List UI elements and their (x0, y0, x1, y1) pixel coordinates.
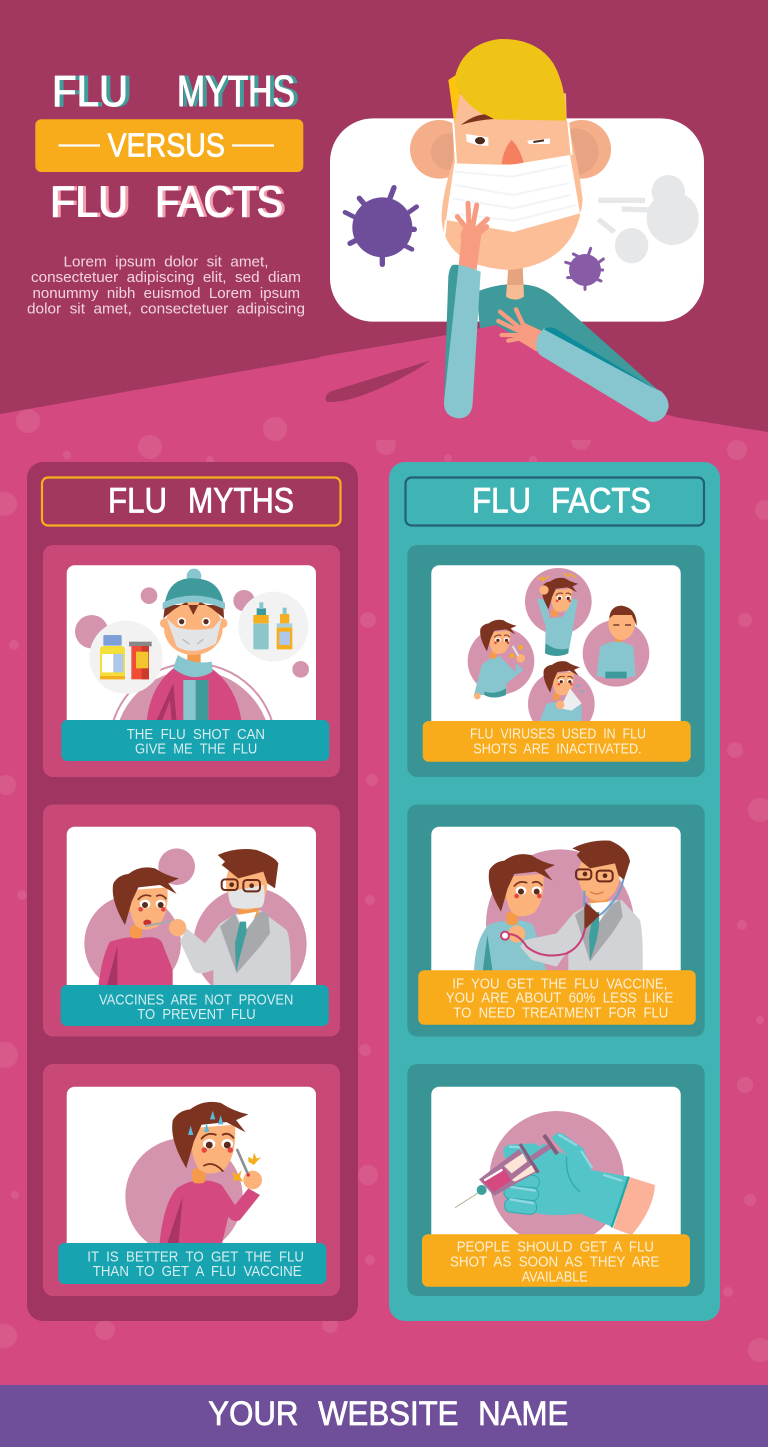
icon: large virus (345, 188, 417, 264)
caption (418, 970, 696, 1025)
right sleeve (536, 327, 669, 422)
caption (58, 1243, 326, 1284)
illustration: masked patient with medicine (75, 568, 309, 720)
caption: SHOTS ARE INACTIVATED. (473, 741, 642, 757)
caption: THAN TO GET A FLU VACCINE (93, 1264, 302, 1280)
intro text (27, 254, 305, 318)
footer (0, 1385, 768, 1447)
neck (506, 267, 524, 300)
pink blanket background (0, 325, 768, 1447)
illustration: four flu symptoms (468, 568, 649, 737)
head (442, 93, 583, 270)
hair (448, 39, 566, 124)
caption: IF YOU GET THE FLU VACCINE, (452, 976, 667, 992)
caption: PEOPLE SHOULD GET A FLU (457, 1240, 654, 1256)
caption: VACCINES ARE NOT PROVEN (99, 992, 293, 1008)
caption: SHOT AS SOON AS THEY ARE (450, 1255, 660, 1271)
caption: AVAILABLE (522, 1270, 588, 1286)
shirt (477, 284, 662, 393)
panel: flu facts (389, 462, 720, 1321)
hero illustration: sick man with mask in bed (320, 39, 720, 440)
caption: THE FLU SHOT CAN (127, 727, 265, 743)
caption: GIVE ME THE FLU (135, 741, 257, 757)
icon: small virus (566, 248, 603, 289)
title line: flu myths (52, 67, 295, 116)
face mask (444, 123, 585, 240)
caption (423, 721, 691, 762)
illustration: doctor examining patient (84, 848, 307, 1001)
intro text: nonummy nibh euismod Lorem ipsum (32, 286, 300, 302)
blanket front (320, 325, 720, 440)
intro text: Lorem ipsum dolor sit amet, (64, 254, 268, 270)
title line: flu myths: MYTHS (177, 67, 295, 116)
right hand (498, 309, 543, 352)
versus banner (35, 119, 303, 172)
heading: flu myths: FLU (108, 482, 167, 520)
caption: YOU ARE ABOUT 60% LESS LIKE (446, 990, 674, 1006)
caption (61, 720, 329, 761)
heading: flu facts: FLU (472, 482, 531, 520)
card: the flu shot myth (43, 545, 340, 777)
heading: flu facts: FACTS (551, 482, 651, 520)
versus banner: VERSUS (108, 126, 225, 164)
illustration: doctor with stethoscope (474, 840, 643, 970)
title line: flu myths: FLU (52, 67, 128, 116)
heading: flu myths (42, 478, 340, 526)
heading: flu myths: MYTHS (188, 482, 294, 520)
ears (410, 120, 611, 179)
heading: flu facts (406, 478, 704, 526)
left sleeve (444, 265, 481, 418)
caption: TO PREVENT FLU (137, 1007, 256, 1023)
title (35, 67, 303, 226)
icon: cough cloud (597, 175, 699, 263)
title line: flu facts: FLU (50, 178, 128, 226)
title line: flu facts: FACTS (155, 178, 283, 226)
card: better to get flu myth (43, 1064, 340, 1296)
title line: flu facts (50, 178, 283, 226)
card: vaccine effectiveness fact (407, 804, 705, 1036)
caption: IT IS BETTER TO GET THE FLU (87, 1250, 304, 1266)
card: inactivated viruses fact (407, 545, 705, 777)
footer: YOUR WEBSITE NAME (208, 1395, 568, 1433)
illustration: gloved hand with syringe (455, 1111, 655, 1246)
panel: flu myths (27, 462, 358, 1321)
face: eyes, brow and nose (461, 114, 550, 164)
caption (422, 1234, 690, 1287)
caption: TO NEED TREATMENT FOR FLU (453, 1005, 668, 1021)
card: get flu shot fact (407, 1064, 705, 1296)
caption: FLU VIRUSES USED IN FLU (470, 726, 646, 742)
caption (61, 985, 329, 1026)
card: vaccines myth (43, 804, 340, 1036)
blanket fold shadow (326, 361, 430, 402)
intro text: dolor sit amet, consectetuer adipiscing (27, 302, 305, 318)
raised hand (457, 203, 487, 270)
illustration: patient with thermometer (125, 1102, 262, 1255)
intro text: consectetuer adipiscing elit, sed diam (31, 270, 301, 286)
